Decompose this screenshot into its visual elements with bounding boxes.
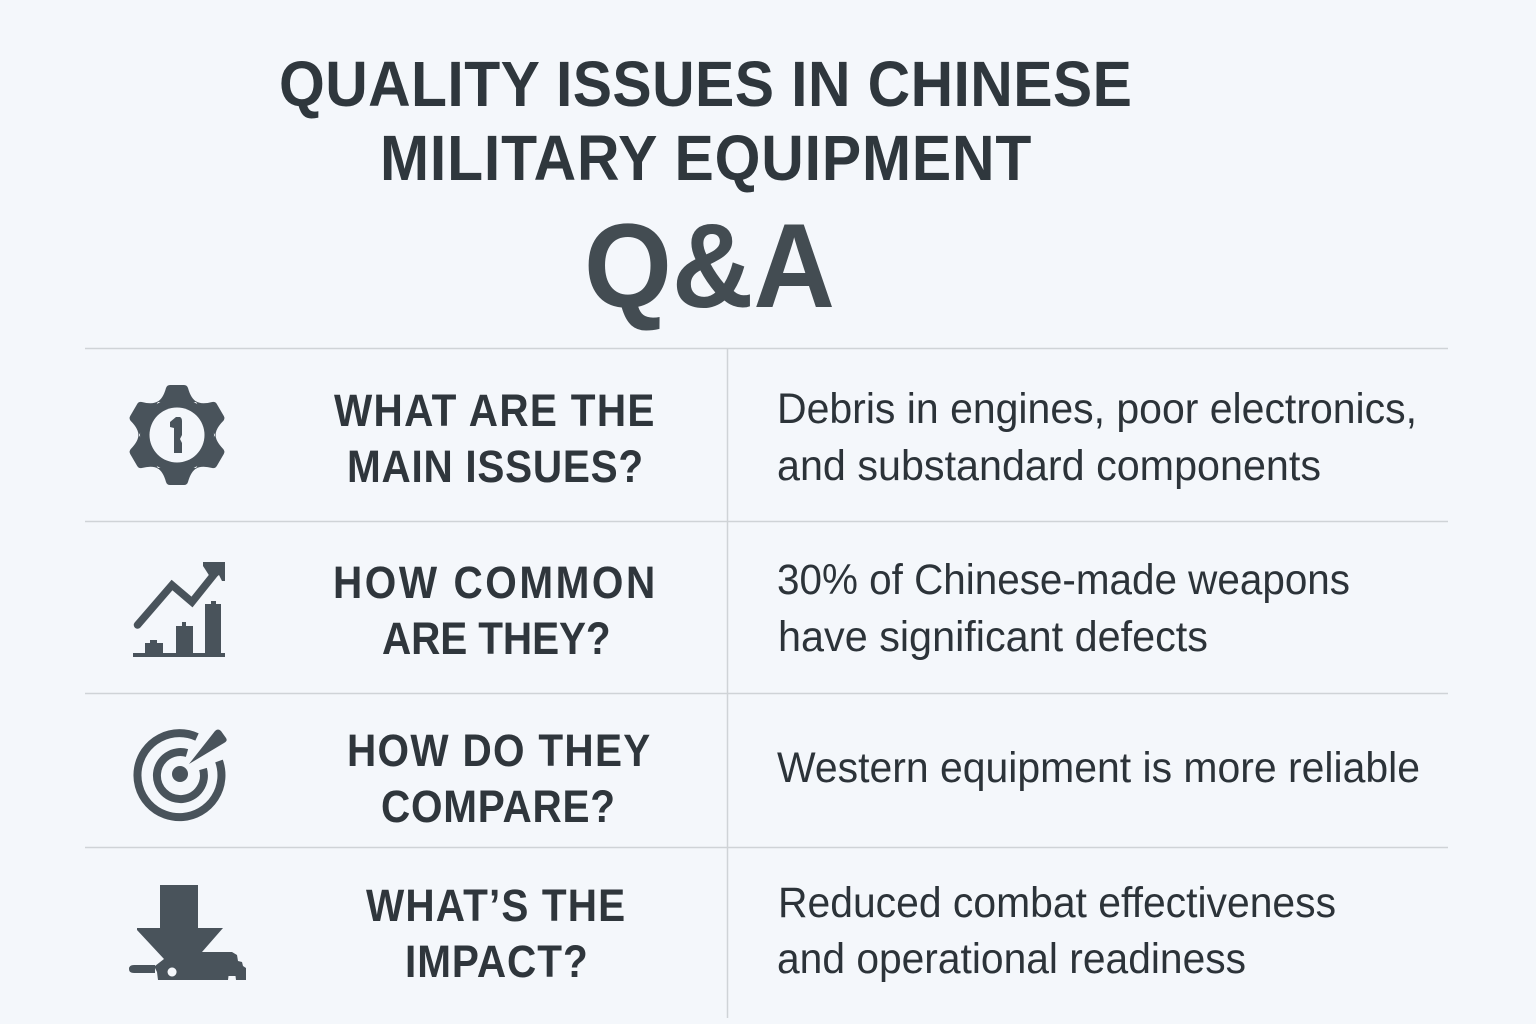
title: QUALITY ISSUES IN CHINESE: [279, 49, 1132, 121]
title: [279, 49, 1132, 195]
title: MILITARY EQUIPMENT: [380, 123, 1031, 195]
question: [333, 558, 655, 665]
question: ARE THEY?: [382, 614, 611, 665]
row: how common: [133, 556, 1350, 665]
answer: Reduced combat effectiveness: [778, 879, 1336, 927]
question: HOW COMMON: [333, 558, 655, 609]
answer: 30% of Chinese-made weapons: [777, 556, 1350, 604]
question: MAIN ISSUES?: [347, 442, 643, 493]
icon: target with dart: [137, 730, 227, 817]
row: impact: [129, 879, 1336, 988]
question: IMPACT?: [405, 937, 588, 988]
question: [366, 881, 625, 988]
question: WHAT ARE THE: [334, 386, 654, 437]
answer: Debris in engines, poor electronics,: [777, 385, 1417, 433]
answer: [777, 879, 1336, 983]
question: HOW DO THEY: [347, 726, 650, 777]
row: how compare: [137, 726, 1420, 833]
row: main issues: [124, 385, 1417, 493]
answer: have significant defects: [778, 613, 1208, 661]
icon: gear with keyhole: [124, 385, 230, 485]
heading: Q&A: Q&A: [584, 199, 835, 333]
answer: and operational readiness: [777, 935, 1246, 983]
question: WHAT’S THE: [366, 881, 625, 932]
icon: down arrow on damaged vehicle: [129, 885, 246, 980]
answer: and substandard components: [777, 442, 1321, 490]
question: COMPARE?: [381, 782, 615, 833]
answer: Western equipment is more reliable: [777, 744, 1420, 792]
answer: [777, 556, 1350, 661]
question: [347, 726, 650, 833]
answer: [777, 385, 1417, 490]
icon: rising chart: [133, 562, 225, 657]
question: [334, 386, 654, 493]
